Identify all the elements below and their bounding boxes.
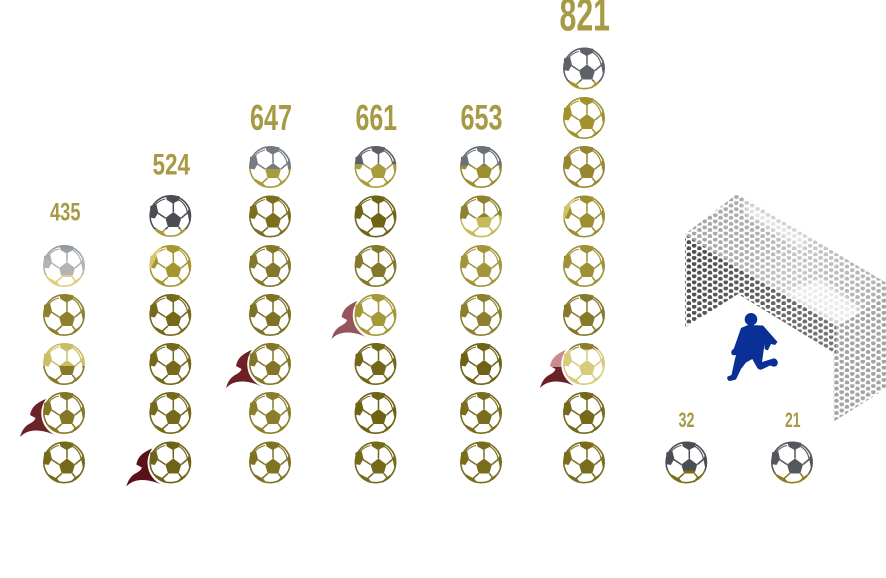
goal right wall (833, 295, 886, 422)
value 32: 32 (678, 409, 694, 432)
swoosh (540, 350, 578, 388)
ball (460, 343, 502, 384)
column: 661 (332, 97, 397, 483)
ball (564, 245, 604, 286)
ball (44, 245, 84, 286)
ball (355, 442, 396, 483)
column: 647 (226, 97, 292, 483)
ball (150, 343, 191, 384)
ball (460, 196, 502, 237)
ball (460, 245, 502, 286)
column: 524 (126, 148, 191, 486)
ball (150, 442, 191, 483)
swoosh (126, 448, 164, 486)
column: 21 (772, 409, 812, 483)
value 524: 524 (152, 148, 190, 182)
column: 32 (666, 409, 707, 483)
ball (564, 294, 604, 335)
ball (460, 294, 502, 335)
value 653: 653 (460, 98, 502, 138)
ball (250, 196, 290, 237)
value 21: 21 (785, 409, 801, 432)
ball (44, 392, 84, 433)
ball (250, 146, 290, 187)
ball (250, 343, 290, 384)
icon: blue goalkeeper (727, 313, 778, 381)
ball (355, 294, 396, 335)
ball (564, 442, 604, 483)
ball (250, 442, 290, 483)
column: 821 (540, 0, 610, 483)
ball (355, 245, 396, 286)
goal roof (685, 194, 886, 329)
ball (355, 146, 396, 187)
ball (564, 196, 604, 237)
ball (250, 294, 290, 335)
ball (44, 343, 84, 384)
keeper head (745, 313, 757, 326)
column: 435 (20, 198, 84, 483)
ball (564, 343, 604, 384)
ball (44, 294, 84, 335)
keeper body (727, 325, 778, 381)
ball (150, 294, 191, 335)
swoosh (332, 301, 370, 339)
icon: halftone goal (685, 194, 886, 422)
ball (250, 392, 290, 433)
ball (250, 245, 290, 286)
ball (666, 442, 707, 483)
ball (150, 392, 191, 433)
ball (355, 196, 396, 237)
value 647: 647 (250, 97, 292, 138)
ball (355, 392, 396, 433)
ball (150, 195, 191, 236)
goal left wall and front bar (685, 235, 836, 354)
ball (460, 392, 502, 433)
ball (460, 146, 502, 187)
ball (772, 442, 812, 483)
column: 653 (460, 98, 502, 483)
roof highlight along top edge (745, 200, 810, 248)
ball (460, 442, 502, 483)
value 435: 435 (50, 198, 81, 226)
ball (564, 48, 604, 89)
value 661: 661 (356, 97, 397, 138)
ball (150, 245, 191, 286)
ball (564, 146, 604, 187)
swoosh (20, 399, 58, 437)
roof highlight patch (782, 279, 860, 326)
ball (44, 442, 84, 483)
swoosh (226, 350, 264, 388)
ball (564, 392, 604, 433)
ball (355, 343, 396, 384)
ball (564, 97, 604, 138)
